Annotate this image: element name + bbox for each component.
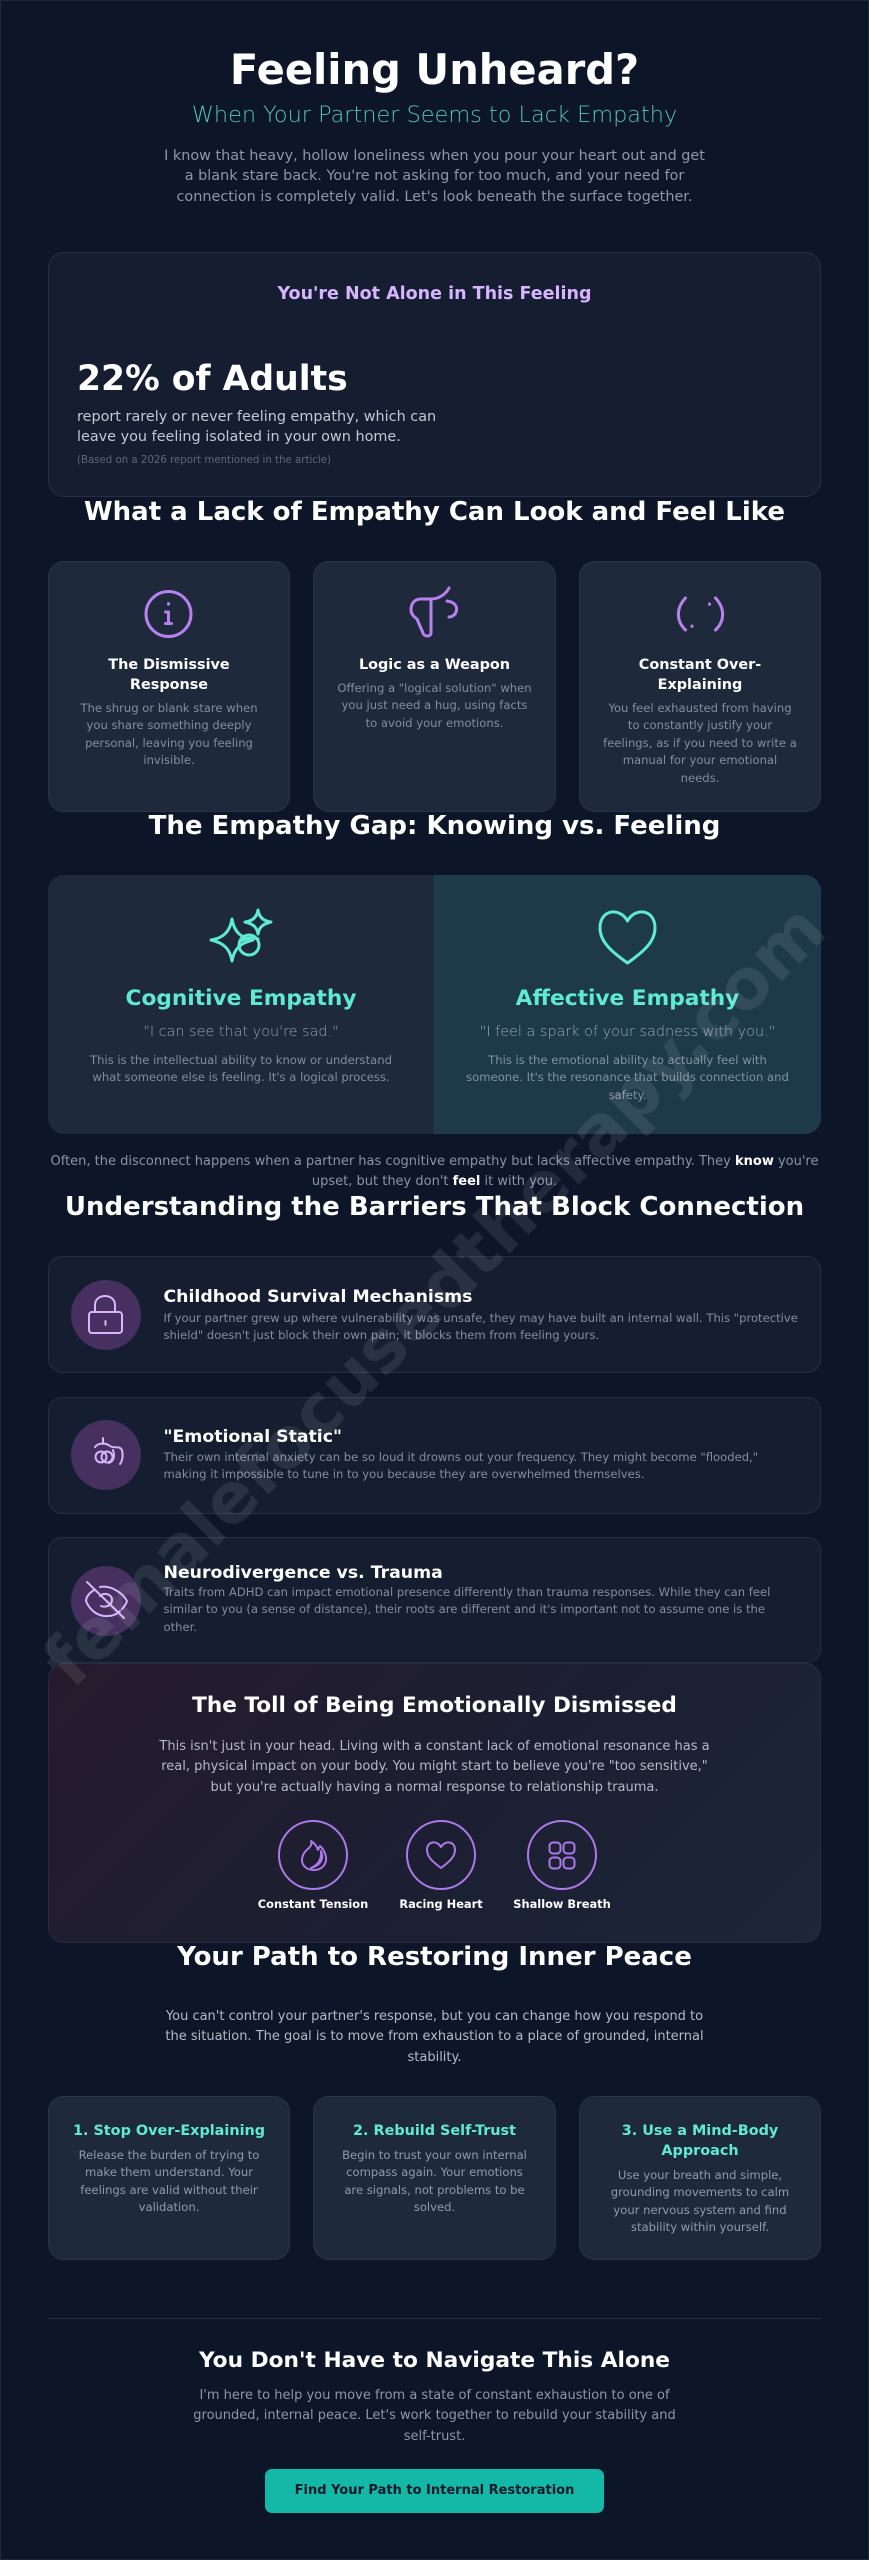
path paragraph: stability. — [408, 2050, 462, 2065]
empathy gap summary: Often, the disconnect happens when a partner has cognitive empathy but lacks affective empathy. They know you're — [50, 1154, 818, 1169]
heading: the empathy gap: The Empathy Gap: Knowing vs. Feeling — [149, 811, 720, 841]
card title: Explaining — [658, 677, 742, 693]
column description: someone. It's the resonance that builds connection and — [466, 1070, 789, 1084]
intro paragraph: a blank stare back. You're not asking for too much, and your need for — [185, 168, 684, 184]
icon: padlock — [71, 1280, 141, 1350]
call to action button — [265, 2469, 604, 2513]
path paragraph: the situation. The goal is to move from exhaustion to a place of grounded, internal — [165, 2029, 704, 2044]
column: affective empathy — [434, 875, 821, 1134]
closing paragraph: self-trust. — [404, 2429, 465, 2444]
step title: 3. Use a Mind-Body — [622, 2123, 778, 2139]
panel: empathy comparison — [48, 875, 821, 1134]
call to action button: Find Your Path to Internal Restoration — [295, 2483, 574, 2498]
barrier description — [164, 1585, 770, 1634]
empathy gap summary: upset, but they don't feel it with you. — [312, 1174, 557, 1189]
icon: megaphone — [410, 586, 458, 638]
step description: Begin to trust your own internal — [342, 2148, 527, 2162]
column description: what someone else is feeling. It's a logical process. — [92, 1070, 390, 1084]
step 2 card — [313, 2096, 556, 2260]
column description: safety. — [609, 1088, 646, 1102]
card description: invisible. — [143, 753, 195, 767]
card description: to avoid your emotions. — [366, 716, 503, 730]
card description: to constantly justify your — [628, 718, 772, 732]
icon: static squiggle — [71, 1420, 141, 1490]
card description — [80, 701, 258, 767]
step 1 card — [48, 2096, 290, 2260]
toll paragraph: real, physical impact on your body. You might start to believe you're "too sensitive," — [161, 1759, 708, 1774]
step description — [611, 2168, 789, 2234]
step title: 2. Rebuild Self-Trust — [353, 2123, 516, 2139]
column description: This is the intellectual ability to know or understand — [90, 1053, 392, 1067]
barrier description: Their own internal anxiety can be so loud it drowns out your frequency. They might become "flooded," — [164, 1450, 758, 1464]
panel: statistic — [48, 252, 821, 497]
path paragraph: You can't control your partner's response, but you can change how you respond to — [166, 2009, 703, 2024]
card description: manual for your emotional — [623, 753, 777, 767]
step title: Approach — [661, 2143, 739, 2159]
closing heading: You Don't Have to Navigate This Alone — [199, 2348, 670, 2373]
barrier: neurodivergence vs trauma — [48, 1537, 821, 1663]
icon: info circle — [144, 590, 192, 638]
stat panel heading: You're Not Alone in This Feeling — [277, 284, 592, 304]
title: Feeling Unheard? — [230, 45, 639, 94]
card description: The shrug or blank stare when — [80, 701, 258, 715]
card description — [603, 701, 797, 785]
stat number: 22% of Adults — [77, 359, 348, 399]
step description: Use your breath and simple, — [618, 2168, 782, 2182]
card title: The Dismissive — [108, 657, 230, 673]
barrier description: making it impossible to tune in to you because they are overwhelmed themselves. — [164, 1467, 644, 1481]
barrier description: other. — [164, 1620, 197, 1634]
step description — [342, 2148, 527, 2214]
step description: grounding movements to calm — [611, 2185, 789, 2199]
step description: are signals, not problems to be — [344, 2183, 525, 2197]
barrier description: Traits from ADHD can impact emotional presence differently than trauma responses. While they can feel — [164, 1585, 770, 1599]
heading: your path: Your Path to Restoring Inner Peace — [177, 1942, 692, 1972]
barrier description: If your partner grew up where vulnerability was unsafe, they may have built an internal wall. This "protective — [164, 1311, 798, 1325]
column title: Cognitive Empathy — [126, 986, 356, 1011]
column: cognitive empathy — [48, 875, 434, 1134]
card description: needs. — [681, 771, 719, 785]
step description: feelings are valid without their — [80, 2183, 258, 2197]
barrier description — [164, 1450, 758, 1481]
closing paragraph — [193, 2388, 676, 2444]
barrier description: similar to you (a sense of distance), their roots are different and it's important not to assume one is the — [164, 1602, 765, 1616]
stat description: leave you feeling isolated in your own home. — [77, 429, 401, 445]
step description: Release the burden of trying to — [79, 2148, 259, 2162]
barrier title: Childhood Survival Mechanisms — [164, 1287, 472, 1307]
symptom icons — [278, 1820, 597, 1890]
card description: personal, leaving you feeling — [85, 736, 253, 750]
card description: you share something deeply — [87, 718, 251, 732]
card: the dismissive response — [48, 561, 290, 812]
column description — [466, 1053, 789, 1102]
card: logic as a weapon — [313, 561, 556, 812]
label: racing heart: Racing Heart — [399, 1897, 483, 1911]
column quote: "I feel a spark of your sadness with you." — [480, 1024, 775, 1040]
card description — [337, 681, 532, 730]
card description: Offering a "logical solution" when — [337, 681, 532, 695]
barrier title: "Emotional Static" — [164, 1427, 342, 1447]
toll paragraph: but you're actually having a normal response to relationship trauma. — [210, 1780, 659, 1795]
icon: heart — [598, 910, 656, 964]
barrier description: shield" doesn't just block their own pain; it blocks them from feeling yours. — [164, 1328, 599, 1342]
step description: validation. — [139, 2200, 199, 2214]
intro paragraph — [164, 148, 705, 205]
step title — [622, 2123, 778, 2159]
barrier: childhood survival mechanisms — [48, 1256, 821, 1373]
step description: stability within yourself. — [631, 2220, 769, 2234]
card title: Response — [130, 677, 208, 693]
barrier: emotional static — [48, 1397, 821, 1514]
column description — [90, 1053, 392, 1084]
card title — [639, 657, 761, 693]
column quote: "I can see that you're sad." — [143, 1024, 339, 1040]
path paragraph — [165, 2009, 704, 2065]
icon: crossed-out eye — [71, 1566, 141, 1636]
barrier description — [164, 1311, 798, 1342]
step 3 card — [579, 2096, 821, 2260]
card title: Constant Over- — [639, 657, 761, 673]
label: shallow breath: Shallow Breath — [513, 1897, 611, 1911]
empathy gap summary — [50, 1154, 818, 1189]
intro paragraph: I know that heavy, hollow loneliness when you pour your heart out and get — [164, 148, 705, 164]
subtitle: When Your Partner Seems to Lack Empathy — [192, 102, 677, 128]
card title — [108, 657, 230, 693]
toll paragraph: This isn't just in your head. Living with a constant lack of emotional resonance has a — [159, 1739, 710, 1754]
closing paragraph: I'm here to help you move from a state of constant exhaustion to one of — [199, 2388, 670, 2403]
heading: what a lack of empathy looks like: What a Lack of Empathy Can Look and Feel Like — [84, 497, 785, 527]
label: constant tension: Constant Tension — [258, 1897, 368, 1911]
stat source note: (Based on a 2026 report mentioned in the article) — [77, 455, 331, 466]
step description — [79, 2148, 259, 2214]
card description: you just need a hug, using facts — [342, 698, 527, 712]
toll paragraph — [159, 1739, 710, 1795]
closing paragraph: grounded, internal peace. Let's work together to rebuild your stability and — [193, 2408, 676, 2423]
intro paragraph: connection is completely valid. Let's look beneath the surface together. — [177, 189, 692, 205]
step description: make them understand. Your — [85, 2165, 253, 2179]
card: constant over-explaining — [579, 561, 821, 812]
watermark: femalefocusedtherapy.com — [27, 888, 841, 1702]
barrier title: Neurodivergence vs. Trauma — [164, 1563, 443, 1583]
step description: compass again. Your emotions — [346, 2165, 523, 2179]
step title: 1. Stop Over-Explaining — [73, 2123, 265, 2139]
card description: feelings, as if you need to write a — [603, 736, 797, 750]
card description: You feel exhausted from having — [608, 701, 792, 715]
icon: parentheses — [676, 596, 724, 632]
heading: understanding the barriers: Understanding the Barriers That Block Connection — [65, 1192, 804, 1222]
icon: sparkles — [210, 908, 272, 962]
card title: Logic as a Weapon — [359, 657, 510, 673]
column description: This is the emotional ability to actually feel with — [488, 1053, 767, 1067]
step description: your nervous system and find — [613, 2203, 787, 2217]
toll heading: The Toll of Being Emotionally Dismissed — [192, 1693, 677, 1718]
step description: solved. — [414, 2200, 455, 2214]
column title: Affective Empathy — [516, 986, 739, 1011]
panel: the toll of being dismissed — [48, 1663, 821, 1943]
stat description — [77, 409, 436, 445]
stat description: report rarely or never feeling empathy, which can — [77, 409, 436, 425]
